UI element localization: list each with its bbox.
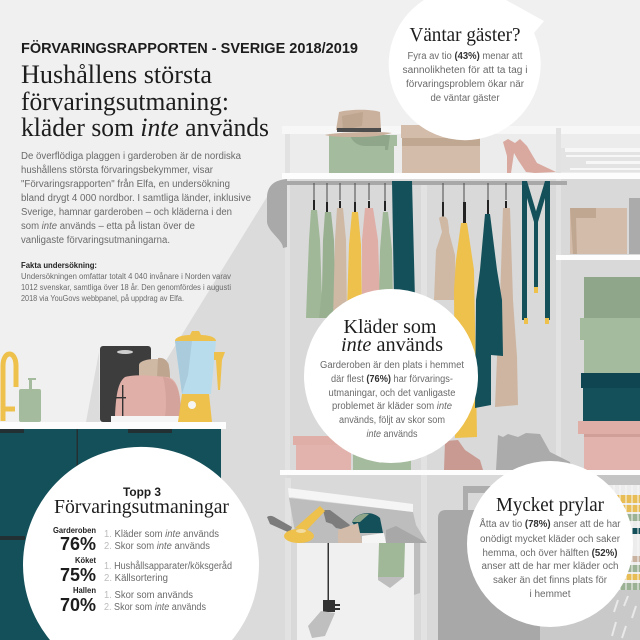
text block: utmaningar, och det vanligaste: [328, 388, 456, 399]
list: hallen: 1. Skor som används: [104, 590, 193, 601]
fakta text block: 2018 via YouGovs webbpanel, på uppdrag av Elfa.: [21, 294, 184, 303]
heading: Mycket prylar: [496, 494, 604, 516]
text block: anser att de har mer kläder och: [482, 561, 618, 572]
icon: teal suspenders: [522, 181, 550, 324]
garment: teal trousers: [392, 181, 415, 300]
garment: green shirt 3: [379, 212, 393, 300]
garment: yellow shirt: [347, 212, 362, 310]
heading: [54, 485, 229, 518]
fakta text block: 1012 svenskar, samtliga över 18 år. Den genomfördes i augusti: [21, 283, 231, 292]
closet wall and light wedge: [86, 178, 640, 640]
intro text block: som inte används – etta på listan över de: [21, 220, 195, 232]
icon: pink box and green box on floor shelf: [293, 436, 411, 470]
list: hallen: 2. Skor som inte används: [104, 602, 206, 613]
icon: wire basket: [596, 475, 640, 638]
garment: green shirt: [306, 210, 325, 318]
icon: overflowing white bin: [267, 488, 427, 640]
icon: gray boots: [496, 433, 572, 470]
hangers: [314, 183, 506, 210]
text block: [402, 51, 528, 104]
text block: [320, 360, 464, 440]
list: köket: [104, 560, 232, 584]
header label: FÖRVARINGSRAPPORTEN - SVERIGE 2018/2019: [21, 40, 358, 57]
panel: mycket prylar bubble: [467, 461, 633, 627]
stat: garderoben 76%: [53, 525, 96, 554]
title: [21, 59, 269, 142]
intro text block: De överflödiga plaggen i garderoben är de nordiska: [21, 151, 241, 162]
icon: pink heels: [503, 139, 556, 173]
stat: garderoben 76%: 76%: [60, 534, 96, 554]
garment: tan shirt 4: [434, 216, 456, 300]
text block: [480, 517, 621, 600]
heading: Väntar gäster?: [410, 24, 521, 46]
text block: där flest (76%) har förvarings-: [331, 374, 453, 385]
icon: cord and plug: [308, 543, 340, 638]
intro text block: "Förvaringsrapporten" från Elfa, en undersökning: [21, 178, 230, 190]
text block: saker än det finns plats för: [493, 575, 608, 586]
icon: blender: [175, 331, 225, 422]
text block: i hemmet: [530, 589, 571, 600]
icon: cutting board: [100, 346, 151, 422]
icon: tan box: [401, 125, 480, 173]
heading: Kläder som: [344, 316, 437, 338]
heading: [341, 316, 443, 356]
text block: Garderoben är den plats i hemmet: [320, 360, 464, 371]
stat: köket 75%: 75%: [60, 565, 96, 585]
list: hallen: [104, 590, 206, 613]
fakta text block: [21, 261, 231, 303]
list: garderoben: 1. Kläder som inte används: [104, 529, 219, 540]
garment: yellow dress: [454, 223, 477, 438]
icon: yellow faucet: [2, 354, 16, 421]
stat: hallen 70%: [60, 585, 96, 615]
hanging clothes: [306, 181, 518, 438]
text block: Åtta av tio (78%) anser att de har: [480, 517, 621, 530]
fakta text block: Undersökningen omfattar totalt 4 040 invånare i Norden varav: [21, 272, 231, 281]
kitchen counter and cabinets: [0, 422, 226, 640]
garment: tan trousers: [495, 208, 518, 407]
garment: pink shirt: [362, 208, 380, 300]
icon: hanging green towel: [378, 543, 405, 588]
bin contents: [267, 506, 427, 543]
icon: soap bottle: [19, 378, 41, 422]
stat: hallen 70%: 70%: [60, 595, 96, 615]
title: kläder som inte används: [21, 112, 269, 142]
heading: Topp 3: [123, 485, 161, 499]
icon: tan box on right shelf: [570, 198, 640, 254]
text block: onödigt mycket kläder och saker: [480, 534, 621, 545]
text block: hemma, och över hälften (52%): [482, 548, 618, 559]
garment: teal coat: [475, 214, 503, 408]
list: köket: 2. Källsortering: [104, 573, 168, 584]
icon: toaster: [111, 358, 181, 422]
heading: inte används: [341, 334, 443, 356]
text block: de väntar gäster: [430, 93, 500, 104]
title: Hushållens största: [21, 59, 212, 89]
text block: inte används: [366, 429, 418, 440]
stat: garderoben 76%: Garderoben: [53, 525, 96, 535]
fakta text block: Fakta undersökning:: [21, 261, 97, 270]
list: köket: 1. Hushållsapparater/köksgeråd: [104, 560, 232, 572]
heading: Förvaringsutmaningar: [54, 496, 229, 518]
stat: köket 75%: Köket: [75, 555, 96, 565]
text block: används, följt av skor som: [339, 415, 445, 426]
stat: köket 75%: [60, 555, 96, 585]
intro text block: [21, 151, 251, 246]
stacked storage boxes: [578, 277, 640, 470]
title: förvaringsutmaning:: [21, 86, 229, 116]
stat: hallen 70%: Hallen: [73, 585, 96, 595]
panel: väntar gäster bubble: [389, 0, 544, 140]
intro text block: hushållens största förvaringsbekymmer, visar: [21, 164, 214, 176]
icon: gray suitcase: [438, 486, 540, 640]
panel: topp 3 förvaringsutmaningar: [23, 447, 259, 640]
intro text block: Sverige, hamnar garderoben – och kläderna i den: [21, 207, 232, 218]
panel: kläder som inte används bubble: [304, 289, 478, 463]
list: garderoben: 2. Skor som inte används: [104, 541, 210, 552]
text block: Fyra av tio (43%) menar att: [408, 51, 523, 62]
intro text block: vanligaste förvaringsutmaningarna.: [21, 235, 170, 246]
icon: pink boot: [444, 440, 483, 470]
text block: problemet är kläder som inte: [332, 401, 452, 412]
intro text block: bland drygt 4 000 nordbor. I samtliga länder, inklusive: [21, 193, 251, 204]
icon: hat on green box: [325, 110, 397, 173]
closet shelves and posts: [280, 126, 640, 640]
garment: tan shirt: [333, 208, 347, 320]
garment: green shirt 2: [319, 212, 335, 318]
list: garderoben: [104, 529, 219, 552]
icon: gray coat at the left edge: [267, 179, 287, 248]
text block: sannolikheten för att ta tag i: [402, 65, 528, 76]
hanger clips: [313, 200, 507, 224]
text block: förvaringsproblem ökar när: [406, 79, 525, 90]
